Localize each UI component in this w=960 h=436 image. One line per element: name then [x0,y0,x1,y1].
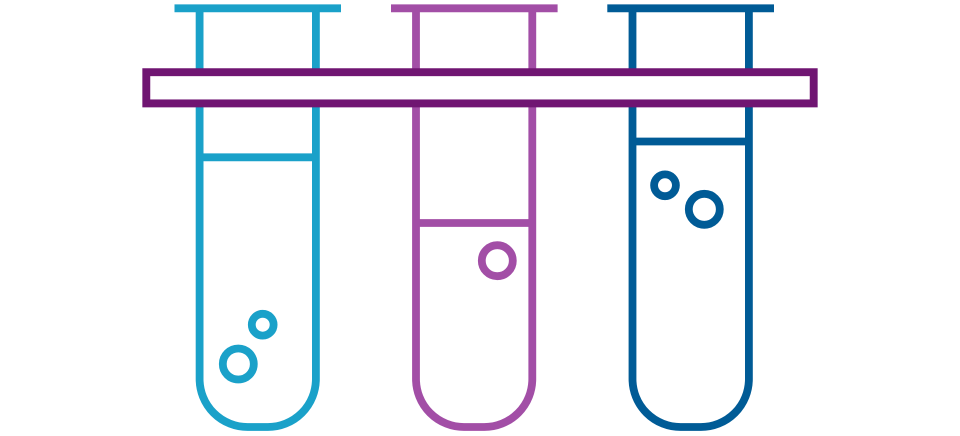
tube rim [607,4,774,12]
bubble [482,245,513,276]
test tube: purple, single bubble [391,4,558,427]
large bubble [689,194,720,225]
test tube: blue, low bubbles [174,4,341,427]
small bubble [654,174,676,196]
rack bar [146,72,814,103]
tube body [632,4,749,427]
tube body [416,4,532,427]
liquid level [632,138,749,145]
liquid level [200,153,316,161]
large bubble [223,348,254,380]
test tube: navy, high bubbles [607,4,774,427]
liquid level [416,219,532,227]
tube rim [391,4,558,12]
tube body [200,4,316,427]
small bubble [252,314,274,336]
tube rim [174,4,341,12]
